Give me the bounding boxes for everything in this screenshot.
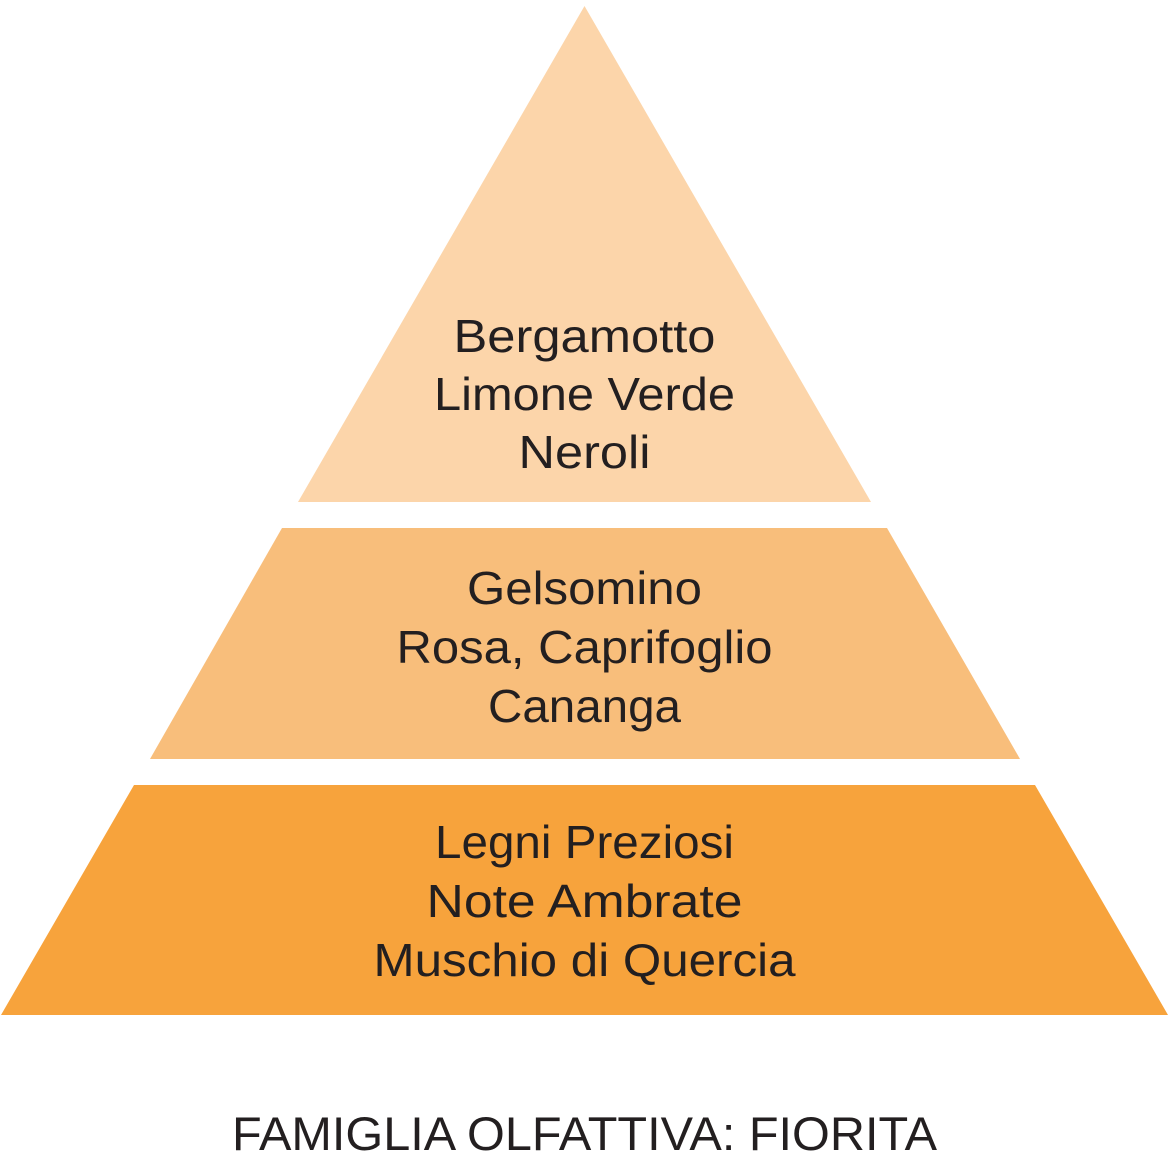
pyramid middle tier: Gelsomino, Rosa, Caprifoglio, Cananga: Gelsomino bbox=[467, 562, 702, 614]
pyramid middle tier: Gelsomino, Rosa, Caprifoglio, Cananga bbox=[150, 528, 1020, 759]
pyramid top tier: Bergamotto, Limone Verde, Neroli: Neroli bbox=[518, 426, 650, 478]
pyramid top tier: Bergamotto, Limone Verde, Neroli bbox=[298, 6, 871, 502]
pyramid top tier: Bergamotto, Limone Verde, Neroli: Bergamotto bbox=[454, 310, 716, 362]
pyramid middle tier: Gelsomino, Rosa, Caprifoglio, Cananga: Rosa, Caprifoglio bbox=[396, 621, 772, 673]
pyramid top tier: Bergamotto, Limone Verde, Neroli: Limone Verde bbox=[434, 368, 735, 420]
pyramid bottom tier: Legni Preziosi, Note Ambrate, Muschio di Quercia bbox=[1, 785, 1168, 1015]
pyramid middle tier: Gelsomino, Rosa, Caprifoglio, Cananga: Cananga bbox=[488, 680, 681, 732]
pyramid bottom tier: Legni Preziosi, Note Ambrate, Muschio di Quercia: Note Ambrate bbox=[426, 875, 742, 927]
pyramid bottom tier: Legni Preziosi, Note Ambrate, Muschio di Quercia: Muschio di Quercia bbox=[374, 934, 796, 986]
pyramid bottom tier: Legni Preziosi, Note Ambrate, Muschio di Quercia: Legni Preziosi bbox=[435, 816, 734, 868]
